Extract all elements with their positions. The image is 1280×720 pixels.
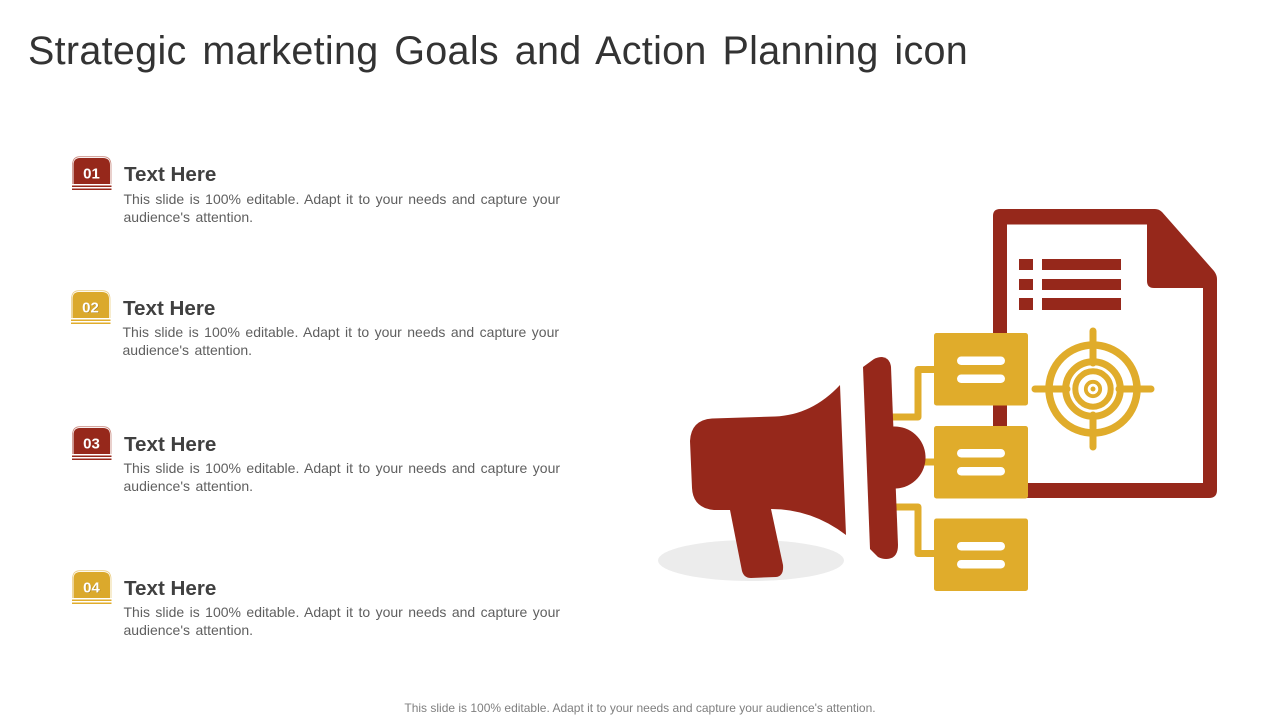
box 1 xyxy=(934,333,1028,406)
icon: megaphone xyxy=(690,357,926,578)
footer note: This slide is 100% editable. Adapt it to your needs and capture your audience's attention. xyxy=(404,701,876,715)
icon: target xyxy=(1035,331,1151,447)
text 02: This slide is 100% editable. Adapt it to your needs and capture your audience's attention. xyxy=(122,324,559,358)
badge 02: 02 xyxy=(83,300,99,317)
badge 02 xyxy=(71,290,110,324)
box 2 xyxy=(934,426,1028,498)
heading 03: Text Here xyxy=(124,432,216,456)
icon: document xyxy=(993,209,1217,498)
badge 04 xyxy=(72,570,112,604)
badge 01 xyxy=(72,156,112,190)
badge 01: 01 xyxy=(83,166,100,182)
heading 01: Text Here xyxy=(124,162,216,186)
document text lines xyxy=(1019,259,1121,310)
text 01: This slide is 100% editable. Adapt it to your needs and capture your audience's attention. xyxy=(124,191,560,225)
box 3 xyxy=(934,518,1028,591)
heading 02: Text Here xyxy=(123,296,215,320)
badge 04: 04 xyxy=(84,580,101,597)
heading 04: Text Here xyxy=(124,576,216,600)
megaphone shadow xyxy=(658,540,844,581)
list item 03 xyxy=(72,426,560,494)
badge 02: 02 xyxy=(82,300,99,316)
badge 03: 03 xyxy=(83,436,100,452)
title: Strategic marketing Goals and Action Planning icon xyxy=(28,29,968,73)
connectors xyxy=(890,370,936,554)
text 04: This slide is 100% editable. Adapt it to your needs and capture your audience's attention. xyxy=(124,604,560,638)
badge 04: 04 xyxy=(83,580,100,596)
list item 04 xyxy=(72,570,560,638)
badge 03 xyxy=(72,426,112,460)
list item 01 xyxy=(72,156,560,225)
list item 02 xyxy=(71,290,559,358)
text 03: This slide is 100% editable. Adapt it to your needs and capture your audience's attention. xyxy=(124,460,560,494)
